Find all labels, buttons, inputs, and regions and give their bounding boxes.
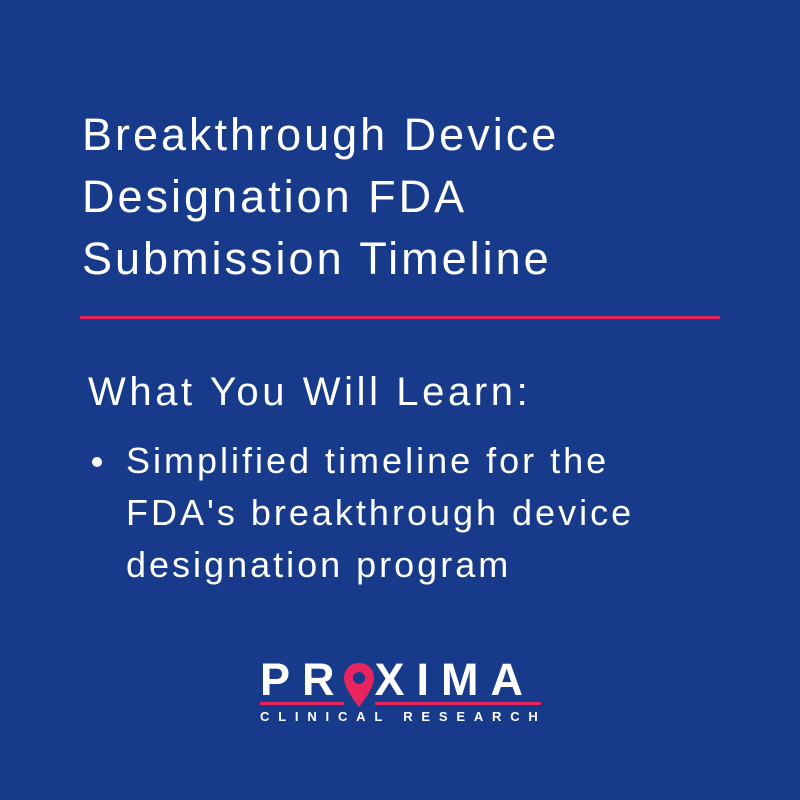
subheading: What You Will Learn: bbox=[88, 370, 531, 414]
title bbox=[82, 109, 559, 284]
bullet list bbox=[92, 440, 634, 585]
bullet text: Simplified timeline for the bbox=[126, 440, 609, 481]
bullet text: designation program bbox=[126, 544, 511, 585]
logo underline bbox=[260, 702, 344, 705]
bullet text: FDA's breakthrough device bbox=[126, 492, 634, 533]
bullet dot bbox=[92, 457, 102, 467]
logo tagline: CLINICAL RESEARCH bbox=[260, 709, 547, 724]
title: Designation FDA bbox=[82, 171, 467, 222]
logo bbox=[260, 654, 547, 724]
title: Submission Timeline bbox=[82, 233, 552, 284]
divider line bbox=[80, 316, 720, 319]
bullet text bbox=[126, 440, 634, 585]
logo wordmark: PR XIMA bbox=[260, 654, 535, 705]
title: Breakthrough Device bbox=[82, 109, 559, 160]
icon: location pin bbox=[344, 663, 374, 707]
